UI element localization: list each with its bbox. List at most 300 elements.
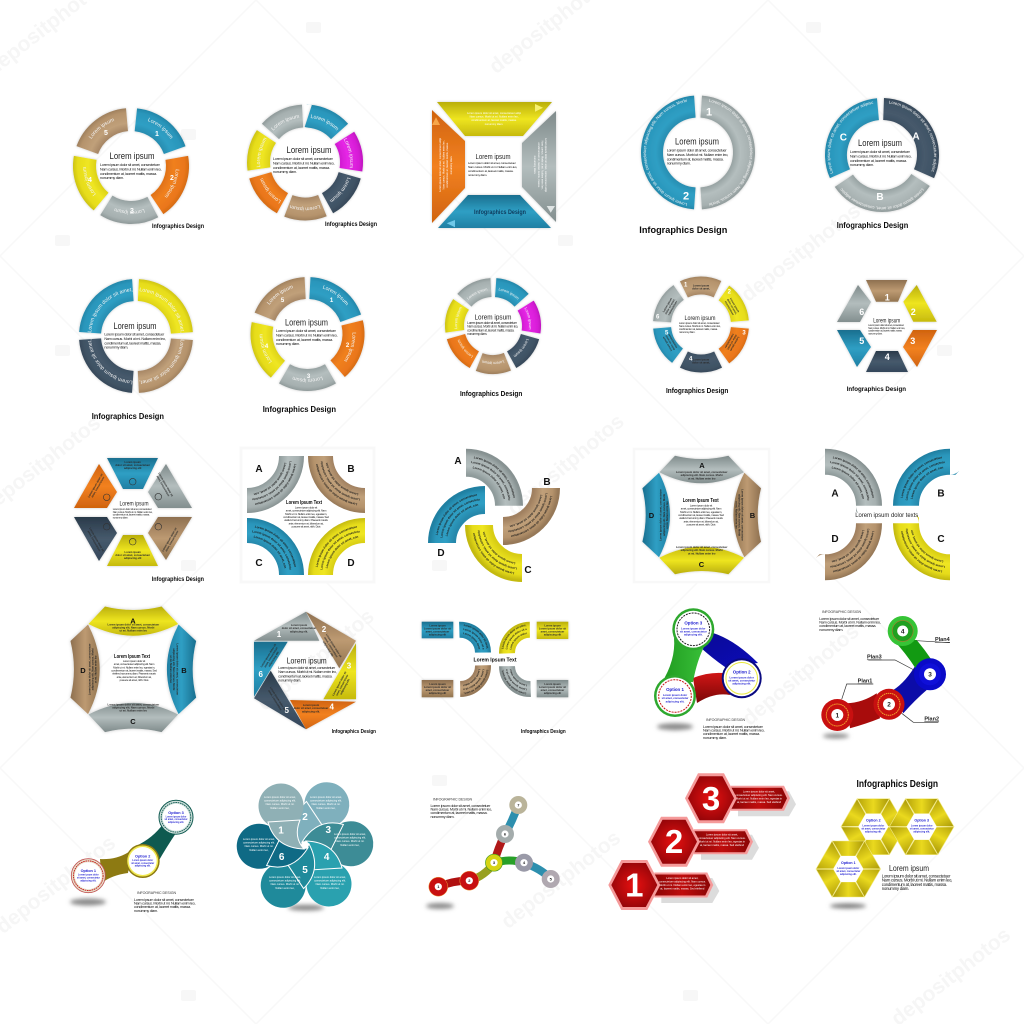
panel: small seven-segment ring xyxy=(444,277,542,376)
band text: Lorem ipsum dolor sit amet, consectetuer xyxy=(87,643,91,695)
segment labels: Lorem ipsum xyxy=(148,118,172,139)
bar: Lorem ipsum dolor sit amet, xyxy=(666,876,699,880)
arc grey: Lorem ipsum dolor xyxy=(505,667,529,690)
hexagon option 3: adipiscing elit. xyxy=(913,831,930,834)
band text: adipiscing elit. Nam cursus. Morbi xyxy=(681,473,723,477)
hexagon option 2 xyxy=(841,799,906,855)
segment text: amet, consectetuer xyxy=(90,476,105,498)
arc C: Lorem ipsum dolor sit amet, con xyxy=(476,530,517,571)
arc yellow: Lorem ipsum dolor sit a xyxy=(501,623,529,652)
segment numbers and text: adipiscing elit. xyxy=(339,677,351,695)
ring segments xyxy=(243,269,372,399)
circle option 3: Option 3 xyxy=(684,620,703,625)
trapezoid text: nonummy diam. xyxy=(449,155,453,174)
body text: condimentum at, laoreet mattis, massa. xyxy=(679,327,718,331)
letters: D xyxy=(437,548,445,559)
body text: eleifend nonummy diam. Praesent mauris xyxy=(112,672,156,676)
caption: Infographics Design xyxy=(92,412,164,421)
ring labels: 4 xyxy=(265,344,269,350)
circle option 2: Lorem ipsum dolor xyxy=(132,860,153,862)
segment labels: Lorem ipsum xyxy=(344,138,354,168)
body text: nonummy diam. xyxy=(104,346,128,350)
segment icons xyxy=(103,478,162,545)
petal text: Nam cursus. Morbi ut mi. xyxy=(245,844,274,848)
body text: nonummy diam. xyxy=(703,736,727,740)
ring segments xyxy=(818,91,946,219)
body text: nonummy diam. xyxy=(679,330,696,334)
bar xyxy=(694,829,759,860)
circle option 1: Lorem ipsum dolor xyxy=(78,875,99,877)
bar: at, laoreet mattis, massa. Sed eleifend xyxy=(660,886,705,890)
body text: Lorem ipsum dolor sit amet, consectetuer xyxy=(113,508,152,511)
segment text: Lorem ipsum dolor sit xyxy=(88,527,105,552)
trapezoid text: Nam cursus. Morbi ut mi. Nullam enim leo, xyxy=(540,141,544,190)
body text: Morbi ut mi. Nullam enim leo, egestas in, xyxy=(285,512,327,516)
petal text: consectetuer adipiscing elit. xyxy=(334,836,366,840)
numbers: 3 xyxy=(910,336,915,346)
circle option 3 xyxy=(159,800,193,834)
circle option 2: adipiscing elit. xyxy=(732,682,751,686)
segment numbers and text: 1 xyxy=(684,282,688,288)
connectors xyxy=(661,633,758,703)
circle option 2 xyxy=(722,658,762,698)
band text: adipiscing elit. Nam cursus. Morbi xyxy=(91,648,95,690)
arc C xyxy=(465,525,522,582)
petal text: Nam cursus. Morbi ut mi. xyxy=(312,802,341,806)
trapezoid text: Lorem ipsum dolor sit amet, consectetuer adipi xyxy=(544,138,548,192)
body text: Morbi ut mi. Nullam enim leo, egestas in, xyxy=(680,510,722,514)
band text: Lorem ipsum dolor sit amet, consectetuer xyxy=(676,470,728,474)
segment numbers and text: Lorem ipsum xyxy=(693,358,710,362)
body text: ante, elementum et, bibendum at, xyxy=(684,519,719,523)
panel: six-segment ring xyxy=(646,270,756,379)
segment numbers and text: Lorem ipsum dolor sit xyxy=(325,633,343,658)
arc C: Lorem ipsum dolor sit amet, consectetuer xyxy=(253,518,305,570)
letters: D xyxy=(80,666,86,675)
petals xyxy=(228,774,382,916)
arc A: Lorem ipsum dolor sit amet, consectetuer xyxy=(831,449,883,501)
connectors xyxy=(100,824,176,883)
band text: Lorem ipsum dolor sit amet, consectetuer xyxy=(676,545,728,549)
segment numbers and text: Lorem ipsum xyxy=(661,296,673,313)
body text: Nam cursus. Morbi ut mi. Nullam enim leo, xyxy=(134,902,195,906)
arc blue xyxy=(459,622,491,653)
body text: Morbi ut mi. Nullam enim leo, egestas in, xyxy=(113,665,155,669)
panel: seven-segment ring xyxy=(246,104,364,222)
segment numbers and text: dolor sit amet, xyxy=(692,360,710,364)
ring text: 1 xyxy=(706,106,712,118)
ring labels: 2 xyxy=(346,343,350,349)
body text: condimentum at, laoreet mattis, massa. xyxy=(850,159,907,163)
body text: condimentum at, laoreet mattis, massa. xyxy=(703,732,760,736)
segment numbers and text: dolor sit amet, consectetuer xyxy=(282,626,316,630)
segment text: amet, consectetuer xyxy=(164,530,179,552)
bar xyxy=(654,872,719,903)
circle option 1: sit amet, consectetur xyxy=(77,877,100,880)
petal text: Nullam enim leo, xyxy=(320,886,340,890)
node 2: 2 xyxy=(887,702,891,709)
panel: square of four trapezoids xyxy=(432,102,556,228)
arc yellow xyxy=(499,622,530,654)
segment labels xyxy=(83,118,180,215)
plan labels and leaders: Plan1 xyxy=(858,678,872,684)
ring segments xyxy=(646,270,756,379)
segment numbers and text: dolor sit amet, xyxy=(692,286,710,290)
frame xyxy=(241,448,374,582)
heading: Lorem ipsum xyxy=(476,152,510,161)
circle option 3: adipiscing elit. xyxy=(684,633,703,637)
box text: adipiscing elit xyxy=(544,632,561,636)
heading: Lorem ipsum xyxy=(114,321,156,331)
circle option 2: adipiscing elit. xyxy=(135,865,151,868)
letters: C xyxy=(937,534,945,545)
box text: amet, consectetuer xyxy=(426,688,449,692)
node 3: 3 xyxy=(493,860,496,865)
petal text: Nullam enim leo, xyxy=(340,843,360,847)
body text: posuere sit amet, nibh. Duis xyxy=(120,678,149,682)
arc B: Lorem ipsum dolor sit amet, consectetu xyxy=(897,453,947,502)
ring text xyxy=(827,100,936,210)
plan labels and leaders xyxy=(842,637,951,722)
plan labels and leaders: Plan3 xyxy=(867,654,882,660)
segment text: Lorem ipsum xyxy=(125,460,142,464)
body text: Lorem ipsum dolor sit amet, consectetuer xyxy=(273,157,334,161)
caption: Infographics Design xyxy=(263,405,336,414)
petal text: Nullam enim leo, xyxy=(275,886,295,890)
ring labels: 5 xyxy=(281,298,285,304)
body text: eleifend nonummy diam. Praesent mauris xyxy=(679,516,723,520)
segment numbers and text: amet, consectetuer xyxy=(263,646,279,668)
arc D: Lorem ipsum dolor sit amet, con xyxy=(439,497,480,538)
arc brown xyxy=(460,665,491,697)
hexagon option 3: Option 3 xyxy=(914,819,929,823)
panel: four plan chain xyxy=(819,609,951,738)
arc A xyxy=(247,456,304,513)
segment numbers and text xyxy=(258,623,353,715)
arc D: Lorem ipsum dolor sit amet, consectetuer xyxy=(308,517,360,569)
heading: Lorem ipsum xyxy=(285,318,328,328)
bar: Lorem ipsum dolor sit amet, xyxy=(706,833,738,837)
body text: condimentum at, laoreet mattis, massa. Sed xyxy=(111,669,157,673)
segment labels: Lorem ipsum xyxy=(482,360,504,365)
body text: Lorem ipsum dolor sit amet, consectetuer xyxy=(134,898,195,902)
letters: C xyxy=(524,565,532,576)
letters: B xyxy=(750,511,756,520)
floor shadow xyxy=(426,903,454,909)
segment numbers and text: Lorem ipsum xyxy=(291,623,308,627)
segment numbers and text: dolor sit amet, xyxy=(664,334,676,351)
segment numbers and text: Lorem ipsum xyxy=(661,335,673,352)
arc B xyxy=(308,456,365,513)
segment numbers and text: Lorem ipsum xyxy=(303,703,320,707)
body text: condimentum at, laoreet mattis, massa. xyxy=(104,341,161,345)
segment numbers and text: Lorem ipsum xyxy=(729,297,741,314)
watermark background: depositphotos xyxy=(737,199,865,306)
segment labels xyxy=(256,114,354,212)
ring segments xyxy=(439,272,547,380)
arc A: Lorem ipsum dolor sit amet, consectetu xyxy=(252,461,292,500)
heading: Lorem ipsum xyxy=(474,312,512,322)
body text: nonummy diam. xyxy=(278,679,301,683)
segment numbers and text: 3 xyxy=(742,330,746,336)
segment numbers and text: dolor sit amet, xyxy=(726,334,738,351)
body text: Nam cursus. Morbi ut mi. Nullam enim leo, xyxy=(667,153,728,157)
box text: Lorem ipsum dolor sit xyxy=(424,626,451,630)
petal text: consectetuer adipiscing elit. xyxy=(269,879,301,883)
bar: Morbi ut mi. Nullam enim leo, egestas in xyxy=(659,883,706,887)
box text: amet, consectetuer xyxy=(541,688,564,692)
heading: Lorem ipsum xyxy=(110,151,154,161)
circle option 3: sit amet, consectetur xyxy=(165,818,188,821)
segment labels: Lorem ipsum xyxy=(466,288,488,300)
title: INFOGRAPHIC DESIGN xyxy=(137,890,176,895)
segment numbers and text: Lorem ipsum xyxy=(693,284,710,288)
ring text: Lorem ipsum dolor sit amet, consectetuer adipiscing elit. Nam cursus. Morbi xyxy=(643,98,687,206)
body text: nonummy diam. xyxy=(430,815,454,819)
segment numbers and text: dolor sit amet, xyxy=(664,298,676,315)
floor shadow xyxy=(288,905,324,911)
arc A: Lorem ipsum dolor sit amet, consectetu xyxy=(469,453,519,503)
circle option 2: sit amet, consectetur xyxy=(728,678,755,682)
arc B: Lorem ipsum dolor sit amet, consectetuer xyxy=(893,448,945,500)
arc D xyxy=(308,518,365,575)
segment text: dolor sit amet, consectetuer xyxy=(115,463,150,467)
petal text: Nullam enim leo, xyxy=(249,848,269,852)
band text: ut mi. Nullam enim leo xyxy=(688,476,716,480)
body text: Nam cursus. Morbi ut mi. Nullam enim leo, xyxy=(882,878,952,883)
heading: Lorem ipsum xyxy=(684,315,716,322)
letters: A xyxy=(255,464,263,475)
body text: Nam cursus. Morbi ut mi. Nullam enim leo, xyxy=(113,511,153,514)
segment text: adipiscing elit xyxy=(124,556,141,560)
ring text: 2 xyxy=(683,190,689,202)
body text: condimentum at, laoreet mattis, massa. Sed xyxy=(678,513,724,517)
heading: Lorem ipsum xyxy=(873,318,900,324)
segment labels: Lorem ipsum xyxy=(83,167,96,196)
trapezoid text: Nam cursus. Morbi ut mi. Nullam enim leo, xyxy=(442,140,446,189)
node 1: 1 xyxy=(835,712,839,719)
letters: D xyxy=(831,534,839,545)
hexagon option 1 xyxy=(816,841,881,897)
letters: B xyxy=(543,477,551,488)
hexagon option 2: Option 2 xyxy=(866,819,881,823)
ring text: Lorem ipsum dolor sit amet, consectetuer adipiscing elit. Nam cursus. Morbi xyxy=(709,98,753,206)
arc grey: Lorem ipsum dolor sit a xyxy=(501,667,529,695)
segment labels: Lorem ipsum xyxy=(290,205,320,212)
body text: posuere sit amet, nibh. Duis xyxy=(687,523,716,527)
spiral segments xyxy=(254,612,356,729)
caption inside blue trapezoid: Infographics Design xyxy=(474,210,526,216)
ring text: Lorem ipsum dolor sit amet, xyxy=(140,340,184,384)
body text: Nam cursus. Morbi ut mi. Nullam enim leo, xyxy=(276,333,337,337)
ring labels: Lorem ipsum xyxy=(292,376,323,383)
segment labels: Lorem ipsum xyxy=(114,208,145,215)
arc C xyxy=(247,518,304,575)
hexagon option 2: sit amet, consectetur xyxy=(861,828,885,831)
petal text: Lorem ipsum dolor sit amet, xyxy=(264,795,296,799)
arc D: Lorem ipsum dolor sit amet, con xyxy=(830,528,871,569)
petal text: Nullam enim leo, xyxy=(270,806,290,810)
ring text: B xyxy=(876,192,884,203)
circle option 2: Option 2 xyxy=(135,854,150,858)
body text: Nam cursus. Morbi ut mi. Nullam enim leo, xyxy=(850,154,911,158)
circle option 2: sit amet, consectetur xyxy=(131,862,154,865)
segment labels: Lorem ipsum xyxy=(88,118,114,139)
panel: three-segment ring xyxy=(824,97,940,214)
body text: ante, elementum et, bibendum at, xyxy=(289,521,324,525)
segment numbers and text: adipiscing elit. xyxy=(290,629,308,633)
arc C: Lorem ipsum dolor sit amet, con xyxy=(254,536,286,568)
segment numbers and text: 5 xyxy=(665,330,669,336)
arc C xyxy=(893,514,950,580)
band text: ut mi. Nullam enim leo xyxy=(120,709,147,713)
letters: B xyxy=(937,488,945,500)
watermark background: depositphotos xyxy=(253,605,379,715)
ring labels: Lorem ipsum xyxy=(322,285,348,306)
arc A: Lorem ipsum dolor sit amet, consectetuer xyxy=(255,464,296,505)
body text: posuere sit amet, nibh. Duis xyxy=(292,525,321,529)
arc yellow: Lorem ipsum dolor xyxy=(506,628,529,651)
arc D: Lorem ipsum dolor sit amet, consectetuer xyxy=(830,529,882,581)
box text xyxy=(424,624,566,695)
heading: Lorem ipsum xyxy=(858,138,902,148)
segment numbers and text: adipiscing elit. xyxy=(267,650,280,668)
ring labels: Lorem ipsum xyxy=(344,332,356,362)
centre label: Lorem Ipsum Text xyxy=(474,658,517,664)
segment labels: Lorem ipsum xyxy=(524,307,532,330)
body text: nonummy diam. xyxy=(850,163,874,167)
trapezoid text: condimentum at, laoreet mattis, massa. xyxy=(537,142,541,188)
arc blue: Lorem ipsum dolor xyxy=(461,628,485,651)
hexagon badge: 1 xyxy=(625,866,643,904)
caption: Infographics Design xyxy=(639,225,727,236)
arc D: Lorem ipsum dolor sit amet, con xyxy=(319,529,360,570)
panel: four corner arcs in a square xyxy=(247,456,365,575)
floor shadow xyxy=(657,723,693,730)
arc B xyxy=(503,488,560,545)
segment labels: 3 xyxy=(130,208,134,215)
heading: Lorem ipsum xyxy=(675,136,719,146)
arc A: Lorem ipsum dolor sit amet, con xyxy=(830,460,871,501)
connectors xyxy=(438,805,551,887)
band text: adipiscing elit. Nam cursus. Morbi xyxy=(662,494,666,536)
hexagon option 1: sit amet, consectetur xyxy=(836,870,860,873)
band text: adipiscing elit. Nam cursus. Morbi xyxy=(172,648,176,691)
hexagon badge: 2 xyxy=(665,823,683,860)
title: Infographics Design xyxy=(856,779,938,790)
band text xyxy=(659,470,745,555)
ring labels: 1 xyxy=(330,298,334,304)
heading: Lorem Ipsum Text xyxy=(286,500,322,506)
body text: amet, consectetuer adipiscing elit. Nam xyxy=(286,509,327,513)
body text: Nam cursus. Morbi ut mi. Nullam enim leo, xyxy=(273,161,334,165)
petal text: consectetuer adipiscing elit. xyxy=(264,799,296,803)
bar: consectetuer adipiscing elit. Nam cursus. xyxy=(659,880,706,884)
body text: Lorem ipsum dolor sit xyxy=(690,503,713,507)
box text: Lorem ipsum xyxy=(429,682,446,686)
bar: at, laoreet mattis, massa. Sed eleifend xyxy=(737,800,782,804)
segment numbers and text: 6 xyxy=(656,315,660,321)
panel: gold hexagon rings xyxy=(816,779,954,908)
segment numbers and text: adipiscing elit. xyxy=(322,640,335,658)
segment text: Lorem ipsum dolor sit xyxy=(87,473,104,498)
segment labels: 2 xyxy=(170,175,174,182)
petal text: Lorem ipsum dolor sit amet, xyxy=(310,795,342,799)
hexagon option 1: Option 1 xyxy=(841,861,856,865)
caption: Infographics Design xyxy=(152,576,204,583)
petal text: Nam cursus. Morbi ut mi. xyxy=(316,882,345,886)
heading: Lorem ipsum xyxy=(287,656,327,666)
body text: Lorem ipsum dolor sit amet, consectetuer xyxy=(850,150,911,154)
band text: ut mi. Nullam enim leo xyxy=(665,501,669,529)
centre label: Lorem ipsum dolor texts xyxy=(855,512,918,519)
segment numbers and text: 4 xyxy=(689,356,693,362)
body text: Nam cursus. Morbi ut mi. Nullam enim leo, xyxy=(100,167,161,171)
segment labels: Lorem ipsum xyxy=(330,178,351,202)
body text: Lorem ipsum dolor sit amet, consectetuer xyxy=(276,329,337,333)
petal text: Lorem ipsum dolor sit amet, xyxy=(314,875,346,879)
petal numbers: 5 xyxy=(302,865,308,876)
panel: seven node branching chain xyxy=(426,796,560,909)
body text: Lorem ipsum dolor sit xyxy=(123,659,146,663)
body text: nonummy diam. xyxy=(273,170,297,174)
trapezoids xyxy=(432,102,556,228)
panel: step 3 red hexagon xyxy=(685,773,796,823)
panel: two-segment ring xyxy=(640,94,756,210)
band text: Lorem ipsum dolor sit amet, consectetuer xyxy=(659,489,663,541)
trapezoid text: Lorem ipsum dolor sit amet, consectetuer adipi xyxy=(438,138,442,192)
body text: condimentum at, laoreet mattis, massa. xyxy=(430,811,488,815)
band text: ut mi. Nullam enim leo xyxy=(688,551,716,555)
segment numbers and text: dolor sit amet, consectetuer xyxy=(294,706,328,710)
letters: A xyxy=(454,456,462,467)
letters xyxy=(649,461,756,569)
arc A: Lorem ipsum dolor sit amet, consectetu xyxy=(828,453,878,503)
circle option 1: sit amet, consectetur xyxy=(662,696,688,700)
box text: Lorem ipsum xyxy=(544,624,561,628)
floor shadow xyxy=(830,904,866,908)
segment labels: 1 xyxy=(155,131,159,138)
hexagon option 1: adipiscing elit. xyxy=(840,873,857,876)
caption: Infographics Design xyxy=(847,386,906,393)
body text: condimentum at, laoreet mattis, massa. xyxy=(882,882,947,887)
side boxes xyxy=(422,622,568,697)
segment numbers and text: consectetuer xyxy=(667,333,678,349)
letters xyxy=(437,456,551,576)
watermark background: depositphotos xyxy=(503,410,629,520)
heading: Lorem ipsum xyxy=(286,145,332,155)
petal numbers: 1 xyxy=(278,826,284,836)
arc A: Lorem ipsum dolor sit amet, con xyxy=(254,462,286,495)
circle option 1: adipiscing elit. xyxy=(666,699,685,703)
box text: Lorem ipsum xyxy=(544,682,561,686)
numbers: 5 xyxy=(859,336,864,346)
petal numbers: 6 xyxy=(279,852,285,863)
arc brown: Lorem ipsum dolor sit a xyxy=(461,667,489,695)
body text: Nam cursus. Morbi ut mi. Nullam enim leo, xyxy=(819,621,881,625)
letters xyxy=(831,488,945,545)
arc B: Lorem ipsum dolor sit amet, con xyxy=(904,460,945,501)
petal numbers xyxy=(278,812,332,876)
numbers: 4 xyxy=(885,352,890,362)
segment numbers and text: 2 xyxy=(728,290,732,296)
body text: Lorem ipsum dolor sit amet, consectetuer xyxy=(468,161,516,165)
letters: D xyxy=(347,558,355,569)
band text: Lorem ipsum dolor sit amet, consectetuer xyxy=(741,489,745,541)
petal text: Lorem ipsum dolor sit amet, xyxy=(269,875,301,879)
ring text: A xyxy=(912,132,920,142)
ring segments xyxy=(65,100,197,232)
